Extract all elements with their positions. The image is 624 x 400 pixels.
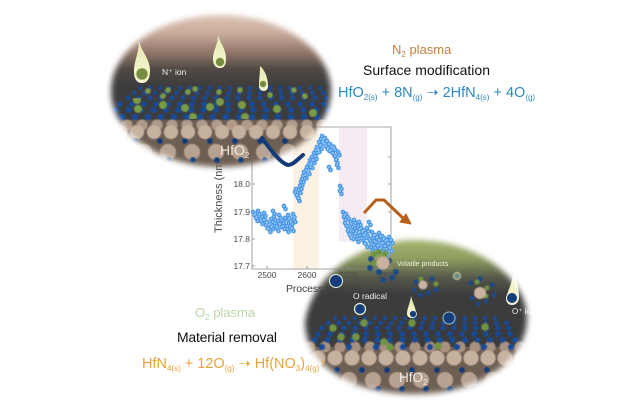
nitrogen-green atoms xyxy=(148,89,305,96)
axes frame xyxy=(252,127,391,269)
band: O2 step xyxy=(339,128,367,242)
x axis tick labels xyxy=(258,270,398,280)
arrow: orange swoosh xyxy=(364,200,411,224)
equation: O2 plasma reaction: 4(g) xyxy=(305,364,320,373)
heading: N2 plasma: N xyxy=(392,42,401,57)
substrate layer xyxy=(295,347,540,400)
data points xyxy=(253,136,392,255)
large oxygen atom xyxy=(330,274,342,288)
y axis tick labels: 18.0 xyxy=(233,179,250,189)
heading: O2 plasma: O xyxy=(195,305,205,320)
panel: O2 plasma surface illustration xyxy=(300,236,532,398)
label: O radical: O radical xyxy=(353,291,387,301)
cluster over chart corner xyxy=(370,252,396,280)
equation: O2 plasma reaction: ➝ Hf(NO xyxy=(234,356,296,372)
nitrogen-green atoms xyxy=(333,323,485,347)
label: N+ ion: N⁺ ion xyxy=(162,67,187,77)
band: N2 step xyxy=(293,128,319,269)
equation: O2 plasma reaction: (g) xyxy=(225,364,235,373)
equation: N2 plasma reaction: 4(s) xyxy=(476,93,490,102)
equation: N2 plasma reaction: (g) xyxy=(525,93,535,102)
y axis tick labels: 17.8 xyxy=(233,234,250,244)
x axis title: Process time (s) xyxy=(286,283,360,295)
y axis tick labels xyxy=(233,179,250,271)
equation: N2 plasma reaction: 2(s) xyxy=(364,93,378,102)
panel: N2 plasma surface illustration xyxy=(100,10,340,175)
label: HfO2 upper: 2 xyxy=(245,151,250,160)
heading: N2 plasma: 2 xyxy=(401,50,406,59)
text: Surface modification: Surface modification xyxy=(363,62,490,78)
ion tails xyxy=(134,34,268,91)
y axis tick labels: 17.7 xyxy=(233,261,250,271)
equation: O2 plasma reaction: ↑ xyxy=(319,356,327,372)
label: HfO2 lower: HfO xyxy=(399,370,423,385)
arrow: blue swoosh xyxy=(262,138,303,165)
volatile product clusters xyxy=(414,272,494,304)
label: O+ ion: O⁺ ion xyxy=(512,307,535,316)
equation: O2 plasma reaction: ) xyxy=(300,356,305,372)
x axis tick labels: 2700 xyxy=(339,270,358,280)
text: Material removal: Material removal xyxy=(177,329,277,345)
equation: N2 plasma reaction: (g) xyxy=(413,93,423,102)
heading: O2 plasma: plasma xyxy=(210,305,256,320)
x axis tick labels: 2800 xyxy=(379,270,398,280)
label: HfO2 lower: 2 xyxy=(423,378,428,387)
chart: thickness vs process time xyxy=(213,127,398,295)
y axis title: Thickness (nm) xyxy=(213,158,225,233)
surface atoms xyxy=(116,88,333,117)
equation: N2 plasma reaction: HfO xyxy=(338,85,364,101)
equation: N2 plasma reaction: + 8N xyxy=(378,85,413,101)
x axis tick labels: 2500 xyxy=(258,270,277,280)
label: HfO2 upper: HfO xyxy=(220,142,245,158)
heading: N2 plasma: plasma xyxy=(406,42,452,57)
equation: N2 plasma reaction: ➝ 2HfN xyxy=(422,85,476,101)
nitrogen ions xyxy=(136,58,266,88)
oxygen radicals xyxy=(354,292,518,324)
equation: O2 plasma reaction: 3 xyxy=(296,364,301,373)
equation: O2 plasma reaction: + 12O xyxy=(181,356,225,372)
surface atoms xyxy=(315,318,525,347)
equation: O2 plasma reaction: HfN xyxy=(142,356,167,372)
y axis tick labels: 17.9 xyxy=(233,207,250,217)
label: Volatile products: Volatile products xyxy=(397,261,449,268)
ion tails xyxy=(407,273,519,318)
equation: O2 plasma reaction: 4(s) xyxy=(167,364,181,373)
x axis tick labels: 2600 xyxy=(298,270,317,280)
equation: N2 plasma reaction: + 4O xyxy=(489,85,525,101)
heading: O2 plasma: 2 xyxy=(205,313,210,322)
substrate layer xyxy=(116,118,326,170)
